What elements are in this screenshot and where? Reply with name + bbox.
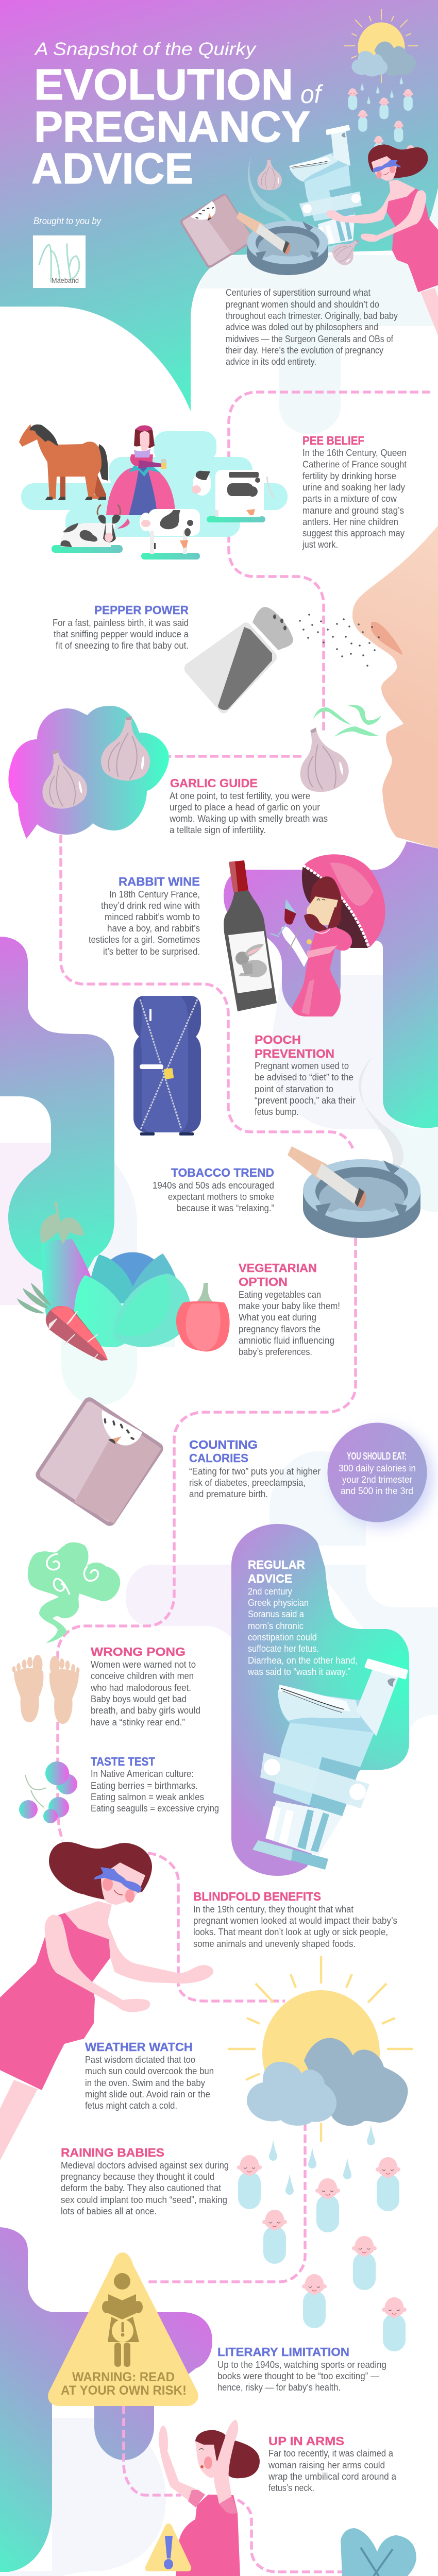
- cow standing right: [192, 470, 274, 517]
- heading: CALORIES: [189, 1451, 248, 1465]
- body text: urine and soaking her lady: [302, 482, 405, 493]
- body text: because it was “relaxing.”: [177, 1203, 274, 1213]
- body text: woman raising her arms could: [268, 2460, 385, 2470]
- illustration: wine bottle with rabbit: [224, 860, 277, 1011]
- illustration: header weather and falling babies: [344, 9, 418, 167]
- body text: Eating salmon = weak ankles: [91, 1792, 204, 1802]
- heading: PEPPER POWER: [94, 603, 189, 617]
- panel: pee belief: [302, 434, 407, 550]
- body text: fetus bump.: [255, 1107, 299, 1117]
- body text: “prevent pooch,” aka their: [255, 1095, 356, 1106]
- body text: baby’s preferences.: [239, 1347, 312, 1357]
- panel: raining babies: [61, 2146, 229, 2216]
- panel: up in arms: [268, 2434, 397, 2493]
- cow lying down: [60, 505, 130, 547]
- body text: they’d drink red wine with: [101, 901, 200, 911]
- illustration: nose: [352, 526, 438, 849]
- icon: warning sign: [48, 2252, 198, 2406]
- body text: expectant mothers to smoke: [168, 1192, 274, 1202]
- callout: you should eat: [328, 1423, 433, 1527]
- body text: At one point, to test fertility, you were: [170, 791, 310, 801]
- body text: books were thought to be “too exciting” —: [217, 2371, 379, 2381]
- panel: tobacco trend: [153, 1166, 274, 1213]
- illustration: header garlic: [257, 158, 282, 190]
- heading: LITERARY LIMITATION: [217, 2345, 349, 2359]
- heading: POOCH: [255, 1033, 301, 1046]
- intro text: throughout each trimester. Originally, bad baby: [226, 311, 398, 321]
- dashed timeline path: [58, 392, 430, 2572]
- body text: [61, 2160, 229, 2216]
- body text: that sniffing pepper would induce a: [54, 629, 189, 639]
- eggplant: [40, 1202, 95, 1329]
- illustration: lady with parasol and wine: [271, 854, 385, 1016]
- body text: For a fast, painless birth, it was said: [53, 618, 189, 628]
- illustration: feet: [12, 1655, 79, 1724]
- icon: pepper shaker: [184, 607, 293, 713]
- left foot: [12, 1655, 43, 1722]
- body text: [90, 1659, 200, 1727]
- body text: Diarrhea, on the other hand,: [248, 1655, 358, 1666]
- body text: antlers. Her nine children: [302, 517, 398, 527]
- body text: much sun could overcook the bun: [85, 2066, 214, 2076]
- heading: GARLIC GUIDE: [170, 776, 258, 790]
- illustration: header smoke: [248, 156, 296, 241]
- illustration: header bathroom scale: [165, 180, 268, 282]
- intro text: [226, 287, 398, 367]
- body text: testicles for a girl. Sometimes: [89, 935, 200, 945]
- body text: mom’s chronic: [248, 1621, 304, 1631]
- body text: a telltale sign of infertility.: [170, 825, 266, 835]
- body text: Up to the 1940s, watching sports or reading: [217, 2360, 386, 2370]
- panel: weather watch: [85, 2040, 214, 2111]
- illustration: header blindfolded woman: [315, 139, 438, 335]
- illustration: queen Catherine: [106, 425, 175, 515]
- panel: garlic guide: [169, 776, 328, 835]
- illustration: chained fridge: [133, 996, 201, 1136]
- illustration: garlic by the nose: [290, 722, 352, 796]
- body text: point of starvation to: [255, 1084, 333, 1094]
- carrot: [17, 1283, 108, 1361]
- heading: [255, 1033, 334, 1060]
- body text: pregnancy flavors the: [239, 1324, 321, 1334]
- heading: PEE BELIEF: [302, 434, 364, 447]
- heading: TOBACCO TREND: [171, 1166, 274, 1179]
- heading: [239, 1261, 317, 1289]
- body text: constipation could: [248, 1632, 317, 1642]
- panel: pepper power: [53, 603, 189, 651]
- body text: In 18th Century France,: [109, 889, 200, 900]
- body text: who had malodorous feet.: [90, 1683, 191, 1693]
- illustration: horse: [19, 423, 108, 500]
- body text: and premature birth.: [189, 1489, 268, 1499]
- body text: manure and ground stag’s: [302, 505, 404, 516]
- body text: risk of diabetes, preeclampsia,: [189, 1478, 306, 1488]
- title: ADVICE: [31, 144, 193, 193]
- body text: [302, 448, 407, 550]
- body text: be advised to “diet” to the: [255, 1072, 353, 1082]
- panel: counting calories: [189, 1438, 321, 1499]
- illustration: header toilet on column: [269, 121, 400, 264]
- heading: [189, 1438, 258, 1465]
- body text: [217, 2360, 386, 2393]
- intro text: midwives — the Surgeon Generals and OBs of: [226, 334, 394, 344]
- panel: blindfold benefits: [193, 1890, 397, 1949]
- panel: regular advice: [247, 1558, 358, 1677]
- intro text: Centuries of superstition surround what: [226, 287, 370, 298]
- body text: Greek physician: [248, 1598, 309, 1608]
- body text: womb. Waking up with smelly breath was: [169, 814, 328, 824]
- body text: fit of sneezing to fire that baby out.: [56, 640, 189, 651]
- panel: literary limitation: [217, 2345, 386, 2393]
- heading: RABBIT WINE: [119, 875, 200, 888]
- body text: was said to “wash it away.”: [247, 1667, 350, 1677]
- body text: [189, 1466, 321, 1499]
- body text: Pregnant women used to: [255, 1061, 349, 1071]
- title: of: [300, 80, 324, 109]
- body text: just work.: [302, 539, 338, 550]
- illustration: bathroom scale: [33, 1395, 165, 1528]
- body text: Eating berries = birthmarks.: [91, 1781, 198, 1791]
- illustration: header ashtray: [237, 212, 328, 275]
- body text: In the 19th century, they thought that what: [193, 1904, 353, 1914]
- intro text: advice in its odd entirety.: [226, 357, 316, 367]
- body text: Past wisdom dictated that too: [85, 2055, 195, 2065]
- purple left blob: [0, 937, 114, 1288]
- cow standing centre: [140, 509, 200, 554]
- illustration: blindfolded woman: [0, 1842, 213, 2160]
- illustration: vegetables: [17, 1202, 230, 1361]
- intro text: their day. Here’s the evolution of pregnancy: [226, 345, 383, 355]
- illustration: berries: [19, 1761, 77, 1823]
- callout: you should eat: 300 daily calories in: [339, 1463, 416, 1473]
- illustration: smoke: [359, 1051, 403, 1187]
- illustration: woman raising arms: [159, 2420, 260, 2576]
- body text: it’s better to be surprised.: [103, 946, 200, 957]
- artichoke: [74, 1252, 191, 1347]
- body text: hence, risky — for baby’s health.: [217, 2382, 341, 2393]
- heading: ADVICE: [248, 1572, 292, 1585]
- callout: you should eat: and 500 in the 3rd: [341, 1486, 413, 1496]
- body text: [255, 1061, 356, 1117]
- illustration: pepper particles: [299, 614, 380, 667]
- bell pepper: [176, 1283, 230, 1351]
- purple right panel behind wine: [224, 841, 438, 1128]
- warning text: [61, 2370, 187, 2398]
- body text: Catherine of France sought: [302, 460, 407, 470]
- panel: rabbit wine: [89, 875, 200, 957]
- heading: RAINING BABIES: [61, 2146, 164, 2159]
- body text: pregnancy because they thought it could: [61, 2172, 214, 2182]
- body text: 2nd century: [248, 1586, 292, 1597]
- body text: have a boy, and rabbit’s: [107, 923, 200, 934]
- intro text: pregnant women should and shouldn’t do: [226, 299, 379, 310]
- body text: sex could implant too much “seed”, making: [61, 2195, 227, 2205]
- body text: [169, 791, 328, 835]
- right foot: [49, 1656, 79, 1724]
- figure reading: [102, 2273, 143, 2367]
- heading: OPTION: [239, 1275, 288, 1289]
- panel: pooch prevention: [255, 1033, 356, 1117]
- intro text: advice was doled out by philosophers and: [226, 322, 378, 332]
- logo: Maeband header: [33, 235, 86, 288]
- illustration: header second garlic: [329, 232, 366, 269]
- illustration: toilet on column: [252, 1660, 407, 1870]
- heading: REGULAR: [248, 1558, 305, 1571]
- illustration: sun, clouds and raining babies: [228, 1956, 413, 2351]
- body text: Eating seagulls = excessive crying: [91, 1803, 219, 1814]
- body text: In the 16th Century, Queen: [302, 448, 407, 458]
- illustration: corset: [325, 2528, 416, 2576]
- body text: Eating vegetables can: [239, 1290, 321, 1300]
- body text: pregnant women looked at would impact their baby’s: [193, 1916, 397, 1926]
- body text: [91, 1769, 219, 1814]
- warning purple panel: [0, 2227, 212, 2572]
- body text: some animals and unevenly shaped foods.: [193, 1939, 356, 1949]
- body text: What you eat during: [239, 1312, 316, 1323]
- body text: [193, 1904, 397, 1949]
- body text: Far too recently, it was claimed a: [268, 2448, 394, 2459]
- body text: have a “stinky rear end.”: [91, 1717, 185, 1727]
- body text: parts in a mixture of cow: [302, 494, 397, 504]
- body text: [53, 618, 189, 651]
- body text: minced rabbit’s womb to: [105, 912, 200, 922]
- body text: Women were warned not to: [91, 1659, 196, 1670]
- body text: [85, 2055, 214, 2111]
- callout: you should eat: YOU SHOULD EAT:: [347, 1451, 407, 1462]
- heading: WRONG PONG: [91, 1645, 186, 1658]
- icon: garlic fumes: [313, 705, 381, 737]
- body text: fertility by drinking horse: [302, 471, 396, 481]
- body text: amniotic fluid influencing: [239, 1335, 334, 1346]
- body text: looks. That meant don’t look at ugly or sick people,: [193, 1927, 388, 1937]
- body text: suggest this approach may: [302, 528, 405, 538]
- heading: COUNTING: [189, 1438, 258, 1451]
- body text: [153, 1180, 274, 1213]
- illustration: ashtray: [288, 1146, 420, 1238]
- heading: TASTE TEST: [91, 1755, 155, 1768]
- illustration: dairy cows: [52, 470, 274, 560]
- title: PREGNANCY: [34, 103, 310, 151]
- body text: [247, 1586, 358, 1677]
- heading: PREVENTION: [255, 1047, 334, 1060]
- title: EVOLUTION: [34, 60, 293, 109]
- body text: make your baby like them!: [239, 1301, 340, 1311]
- icon: small warning triangle: [145, 2523, 191, 2571]
- illustration: stink cloud: [28, 1543, 120, 1643]
- body text: fetus’s neck.: [268, 2483, 314, 2493]
- brought to you by: Brought to you by: [33, 216, 102, 226]
- title: [31, 39, 324, 193]
- callout: you should eat: your 2nd trimester: [342, 1475, 412, 1485]
- body text: [268, 2448, 397, 2493]
- body text: [239, 1290, 340, 1357]
- body text: suffocate her fetus.: [248, 1643, 319, 1654]
- regular advice gradient panel: [231, 1524, 409, 1876]
- heading: [248, 1558, 305, 1585]
- heading: VEGETARIAN: [239, 1261, 317, 1275]
- body text: in the oven. Swim and the baby: [85, 2078, 205, 2088]
- heading: BLINDFOLD BENEFITS: [193, 1890, 321, 1903]
- header gradient panel: [0, 0, 438, 411]
- body text: might slide out. Avoid rain or the: [85, 2089, 210, 2099]
- heading: UP IN ARMS: [268, 2434, 344, 2448]
- body text: wrap the umbilical cord around a: [268, 2471, 397, 2482]
- body text: Baby boys would get bad: [91, 1694, 187, 1704]
- body text: fetus might catch a cold.: [85, 2100, 177, 2111]
- body text: lots of babies all at once.: [61, 2206, 157, 2216]
- body text: Medieval doctors advised against sex during: [61, 2160, 229, 2171]
- body text: Soranus said a: [248, 1609, 305, 1619]
- body text: deform the baby. They also cautioned that: [61, 2183, 221, 2193]
- title: A Snapshot of the Quirky: [34, 39, 257, 59]
- body text: In Native American culture:: [91, 1769, 194, 1779]
- body text: conceive children with men: [91, 1671, 194, 1681]
- body text: 1940s and 50s ads encouraged: [153, 1180, 274, 1191]
- body text: breath, and baby girls would: [91, 1705, 200, 1716]
- panel: vegetarian option: [239, 1261, 340, 1357]
- panel: taste test: [91, 1755, 219, 1814]
- heading: WEATHER WATCH: [85, 2040, 193, 2054]
- panel: wrong pong: [90, 1645, 200, 1727]
- illustration: garlic cloud: [8, 706, 169, 839]
- illustration: pasture background: [21, 431, 288, 537]
- warning text: WARNING: READ: [72, 2370, 175, 2384]
- warning text: AT YOUR OWN RISK!: [61, 2383, 187, 2398]
- body text: urged to place a head of garlic on your: [170, 802, 320, 812]
- body text: [89, 889, 200, 957]
- body text: “Eating for two” puts you at higher: [189, 1466, 321, 1477]
